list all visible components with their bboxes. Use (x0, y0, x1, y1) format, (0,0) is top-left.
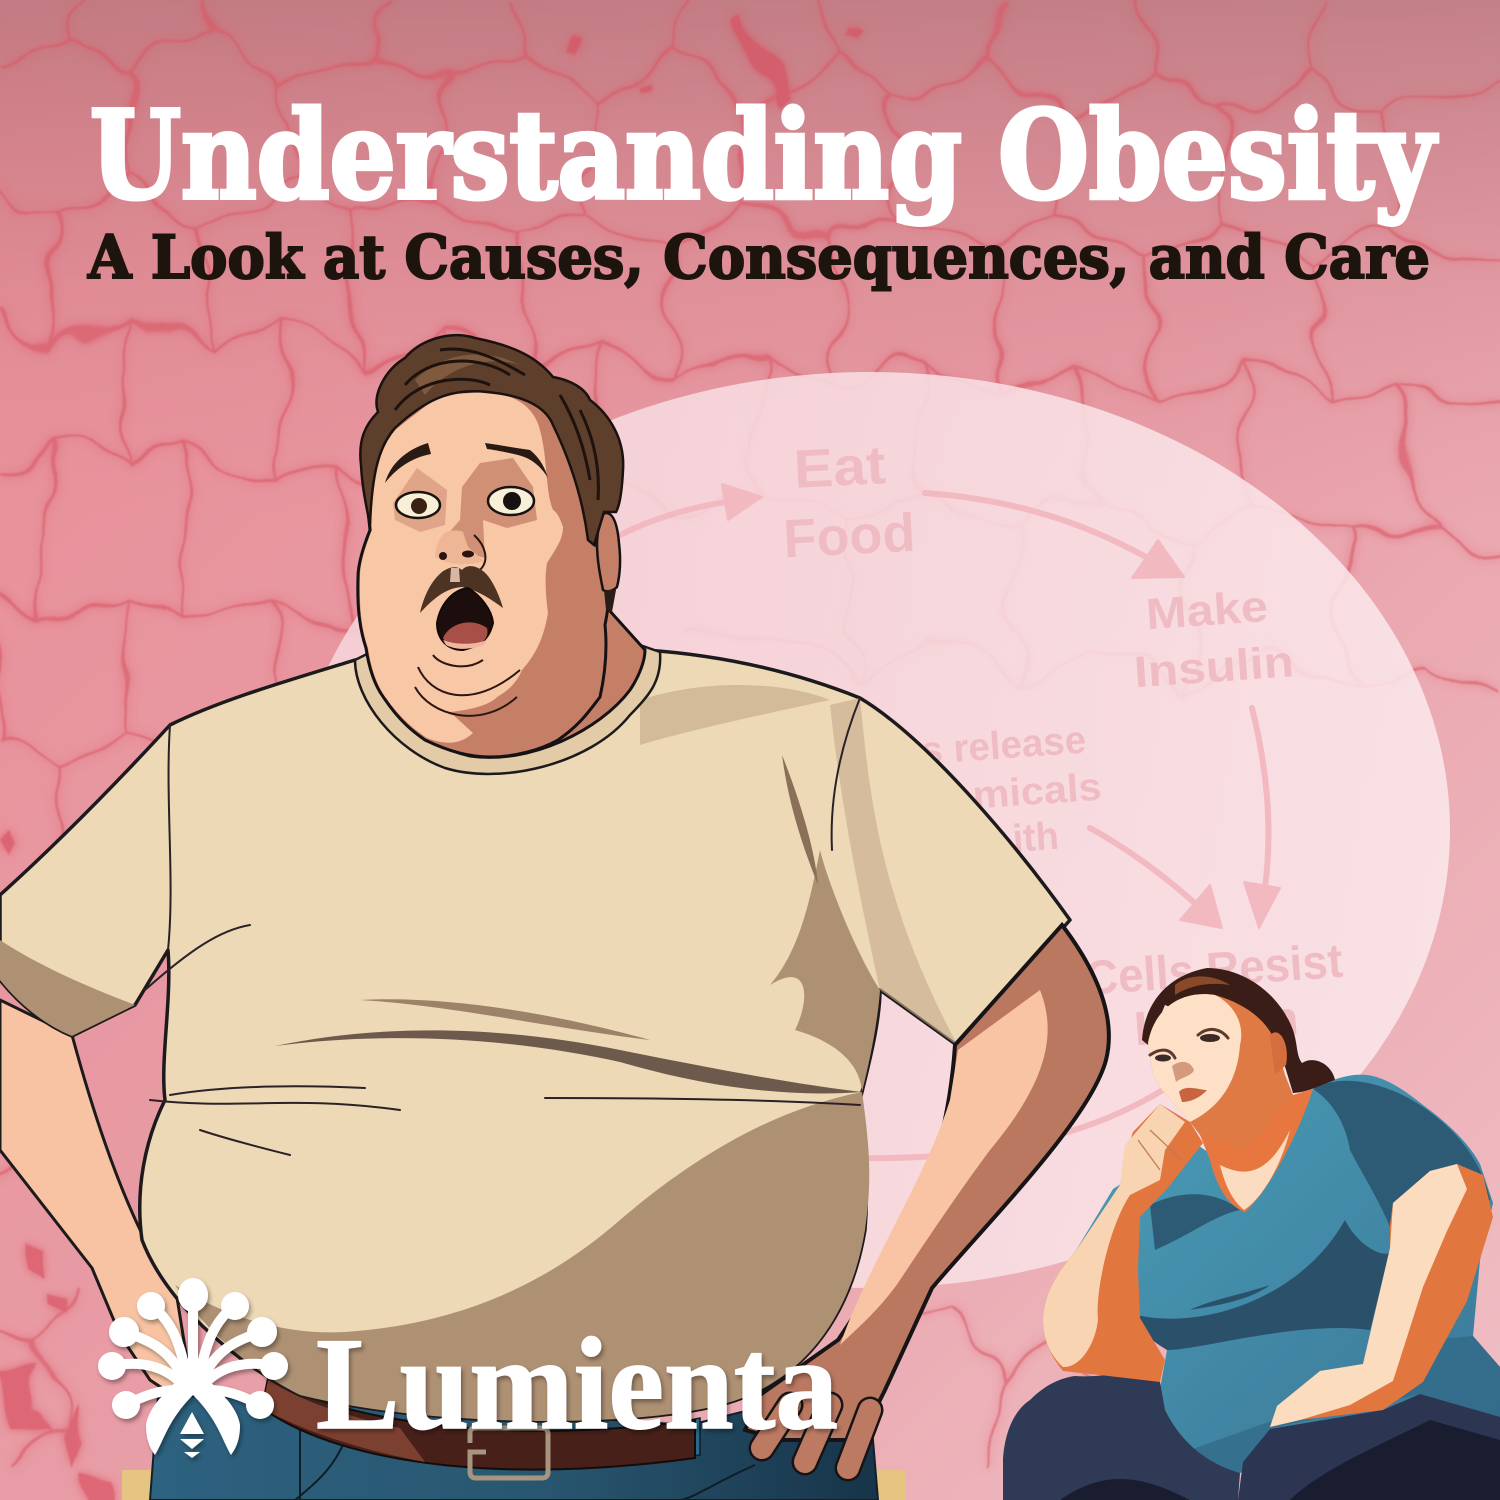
left arm and hand on chin (1043, 1104, 1203, 1382)
blue t-shirt (1075, 1075, 1500, 1473)
beige stubs at base (122, 1470, 905, 1500)
step: Cells Resist Insulin: Insulin (1132, 992, 1300, 1056)
shirt shading (1313, 1081, 1490, 1235)
ear (597, 513, 620, 591)
illustration: surprised man (0, 335, 1109, 1500)
dark trousers (1003, 1371, 1500, 1500)
left eye (396, 492, 440, 518)
shirt shadow: left sleeve (0, 940, 135, 1036)
step: cells release chemicals: emicals (948, 766, 1103, 819)
nose bridge shading (438, 458, 537, 558)
head (358, 335, 623, 757)
nose and lips (1172, 1062, 1194, 1082)
nose (435, 530, 484, 564)
title: Understanding Obesity (90, 83, 1438, 227)
step: Make Insulin: Make (1144, 582, 1270, 639)
belt (262, 1378, 695, 1470)
neck and collar (355, 600, 660, 774)
subtitle: A Look at Causes, Consequences, and Care (87, 223, 1430, 293)
face (1148, 994, 1293, 1150)
t-shirt (0, 650, 1070, 1421)
jeans (150, 1380, 878, 1500)
face highlight (360, 392, 563, 743)
moustache (420, 566, 503, 613)
shirt shadow: lower belly (175, 1092, 869, 1421)
step: Cells Resist Insulin: Cells Resist (1083, 935, 1345, 1006)
shirt fold lines (145, 698, 860, 1155)
step: Eat Food: Eat (792, 435, 887, 500)
open mouth (437, 588, 493, 650)
logo mark (98, 1278, 288, 1458)
chin lines (415, 655, 520, 716)
eye socket shading (393, 468, 447, 532)
logo: Lumienta (98, 1278, 838, 1458)
hair (1142, 968, 1335, 1093)
shirt shadow: under sleeve (770, 850, 880, 1092)
right eye (488, 487, 534, 515)
right arm and hand (745, 925, 1109, 1468)
faded cycle diagram (620, 434, 1348, 1158)
fingers (762, 1405, 870, 1468)
eyes and brows (1150, 1029, 1228, 1058)
step: Make Insulin: Insulin (1132, 637, 1295, 697)
illustration: thoughtful woman (1003, 968, 1500, 1500)
belt buckle (470, 1428, 548, 1478)
ear (1270, 1032, 1287, 1075)
step: Eat Food (778, 434, 917, 569)
step: Cells Resist Insulin (1083, 935, 1348, 1060)
logo wordmark: Lumienta (316, 1310, 838, 1457)
head (1142, 968, 1335, 1150)
arrows between steps (620, 484, 1280, 1158)
neck and chest (1200, 1089, 1313, 1212)
step: Make Insulin (1128, 580, 1295, 697)
man's left arm and hand (0, 1000, 195, 1410)
step: cells release chemicals (920, 718, 1106, 867)
step: cells release chemicals: s release (920, 719, 1088, 773)
face (358, 390, 609, 757)
eyebrows (385, 443, 548, 483)
step: Eat Food: Food (782, 503, 917, 569)
hair (360, 335, 623, 545)
step: cells release chemicals: ith (1011, 815, 1060, 861)
background ellipse: metabolic cycle panel (290, 372, 1450, 1288)
right arm and hand on thigh (1270, 1164, 1493, 1427)
